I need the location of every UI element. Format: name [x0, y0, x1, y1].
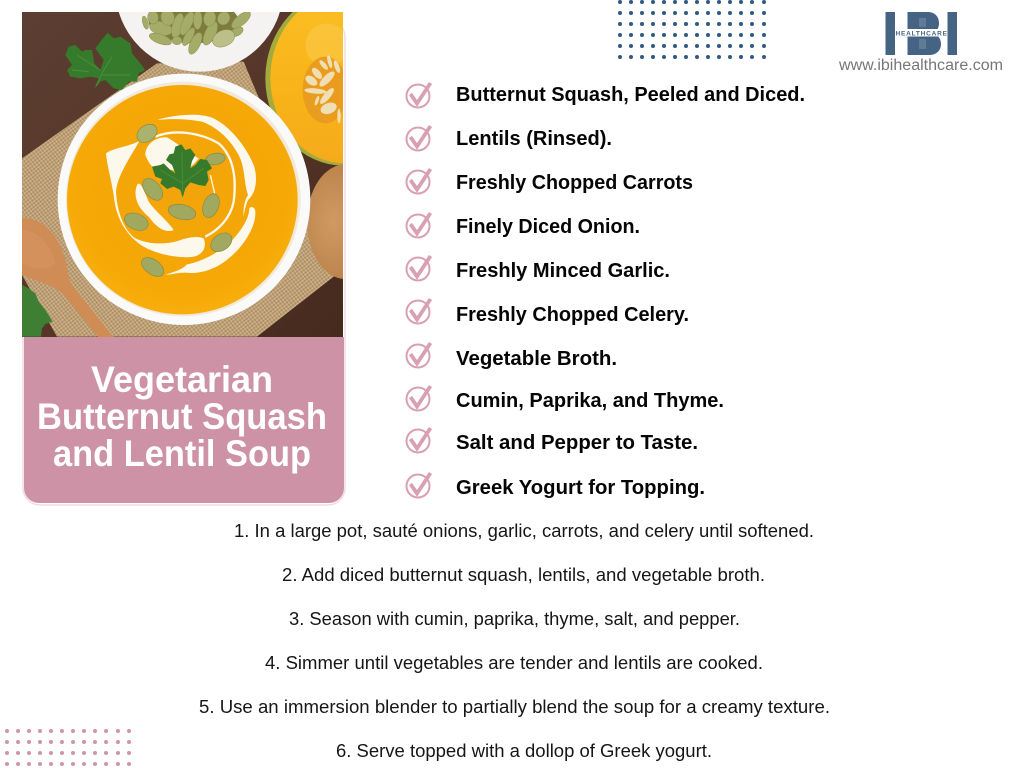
icon: check mark symbol — [406, 83, 430, 108]
title — [37, 359, 327, 474]
logo: IBI Healthcare — [886, 12, 957, 55]
step 3: 3. Season with cumin, paprika, thyme, salt, and pepper. — [289, 609, 740, 629]
icon: check 6 — [406, 299, 430, 324]
ingredient: carrots: Freshly Chopped Carrots — [456, 171, 693, 194]
wooden spoon — [22, 218, 114, 337]
ingredient: broth: Vegetable Broth. — [456, 347, 617, 370]
soup bowl — [58, 74, 310, 325]
cream swirl — [106, 115, 256, 275]
ingredient: butternut squash: Butternut Squash, Peeled and Diced. — [456, 83, 805, 106]
ingredient: celery: Freshly Chopped Celery. — [456, 303, 689, 326]
floating pumpkin seeds — [122, 120, 235, 280]
icon: check 8 — [406, 386, 430, 410]
icon: check 5 — [406, 256, 430, 280]
logo: IBI Healthcare: HEALTHCARE — [896, 30, 948, 38]
ingredient: garlic: Freshly Minced Garlic. — [456, 259, 670, 282]
step 2: 2. Add diced butternut squash, lentils, and vegetable broth. — [282, 565, 765, 585]
cut squash — [265, 0, 422, 166]
step 1: 1. In a large pot, sauté onions, garlic, carrots, and celery until softened. — [234, 521, 814, 541]
dot pattern: top blue — [618, 0, 766, 59]
parsley top left — [65, 33, 145, 90]
ingredient: salt and pepper: Salt and Pepper to Taste. — [456, 431, 698, 454]
icon: check 2 — [406, 126, 430, 150]
ingredient: spices: Cumin, Paprika, and Thyme. — [456, 389, 724, 412]
icon: check 9 — [406, 428, 430, 452]
whole squash — [307, 164, 384, 279]
ingredient: onion: Finely Diced Onion. — [456, 215, 640, 238]
bowl of pumpkin seeds — [115, 0, 283, 72]
step 4: 4. Simmer until vegetables are tender and lentils are cooked. — [265, 653, 763, 673]
panel: recipe title card — [23, 20, 345, 505]
step 5: 5. Use an immersion blender to partially blend the soup for a creamy texture. — [199, 697, 830, 717]
icon: check 4 — [406, 213, 430, 238]
title background — [24, 337, 344, 503]
burlap mat — [22, 62, 334, 337]
website url: www.ibihealthcare.com — [838, 57, 1003, 74]
title: and Lentil Soup — [53, 433, 311, 474]
title: Vegetarian — [91, 359, 273, 400]
step 6: 6. Serve topped with a dollop of Greek yogurt. — [336, 741, 712, 761]
icon: check 7 — [406, 343, 430, 368]
icon: check 10 — [406, 473, 430, 498]
ingredient: lentils: Lentils (Rinsed). — [456, 127, 612, 150]
parsley bottom left — [22, 285, 53, 337]
icon: check 3 — [406, 169, 430, 194]
ingredient: greek yogurt: Greek Yogurt for Topping. — [456, 476, 705, 499]
parsley garnish — [152, 144, 212, 198]
photo: bowl of butternut squash soup — [22, 12, 343, 337]
title: Butternut Squash — [37, 396, 327, 437]
dot pattern: bottom pink — [5, 729, 131, 766]
